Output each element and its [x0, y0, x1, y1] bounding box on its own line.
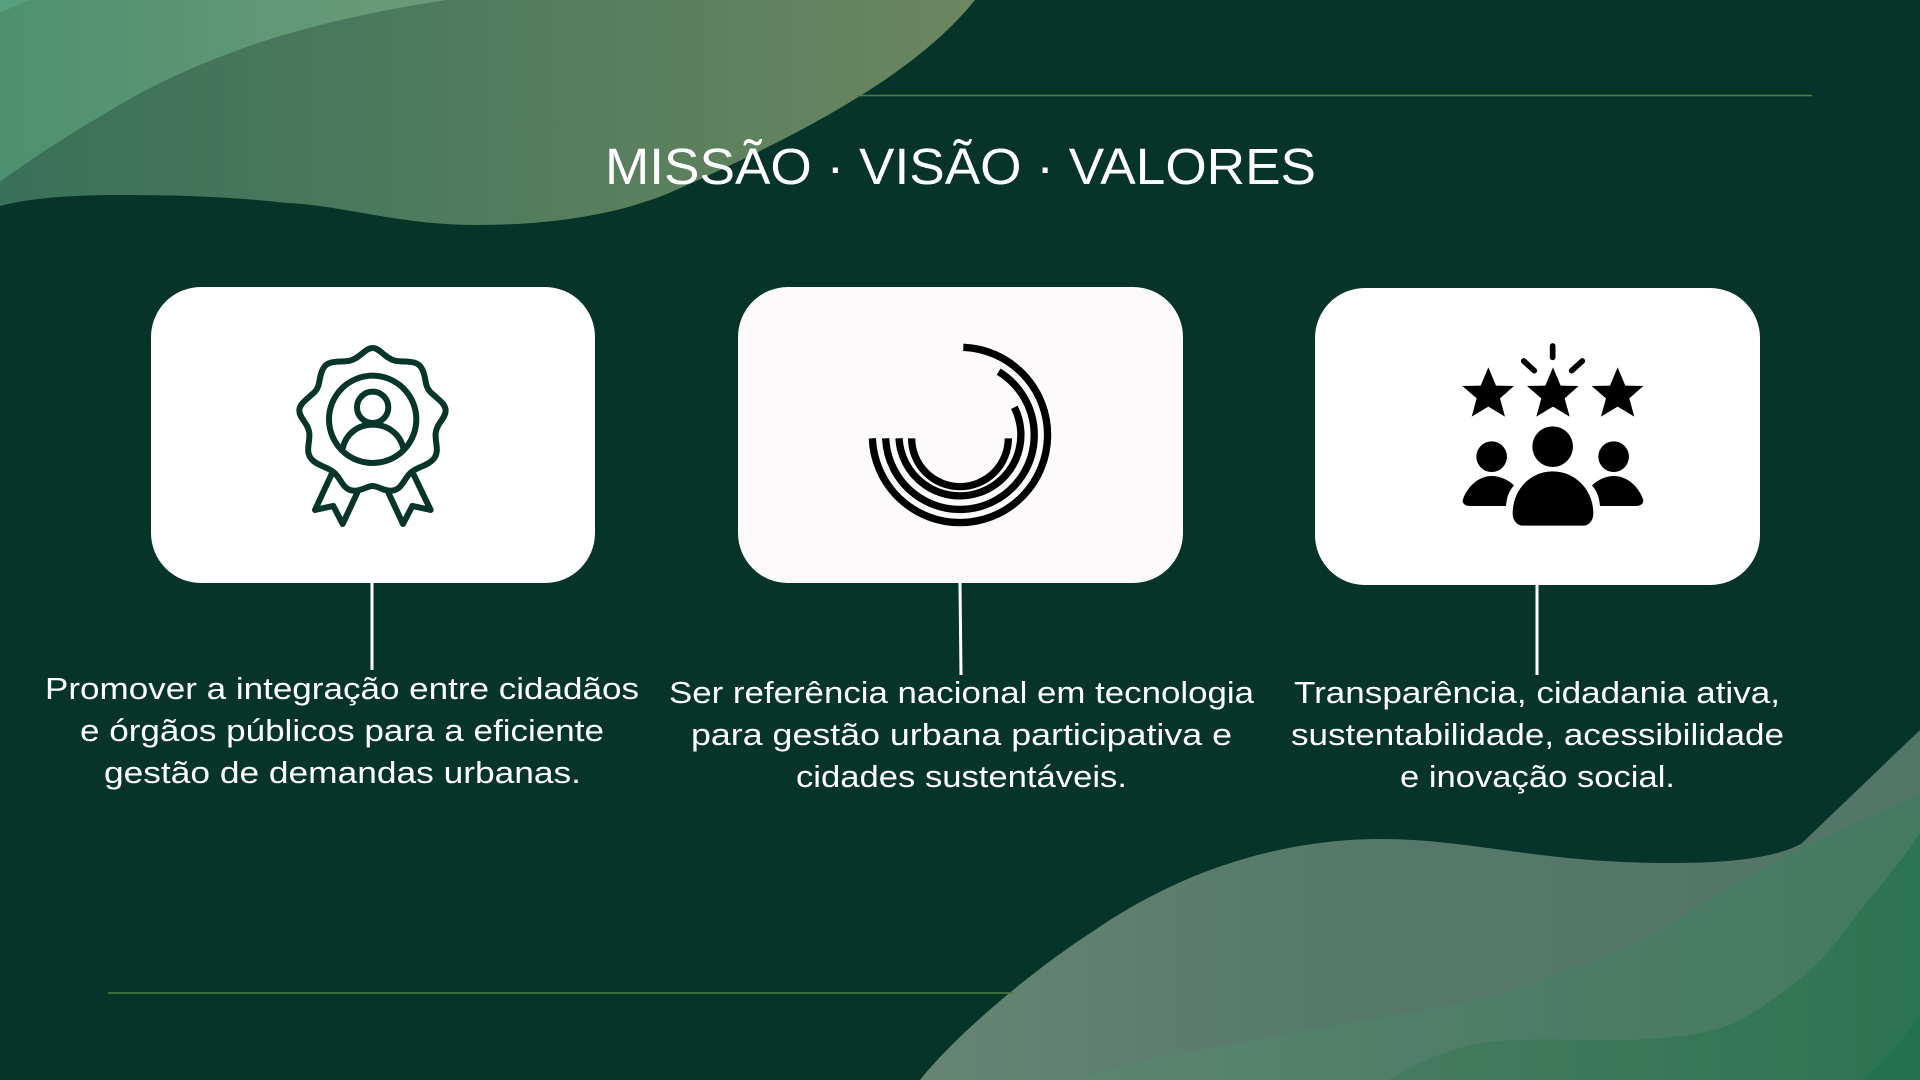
icon: award badge with person: [299, 348, 446, 524]
icon: concentric arcs: [872, 347, 1048, 523]
text: visão: para gestão urbana participativa e: [691, 717, 1232, 752]
card: missão: [151, 287, 595, 583]
title: MISSÃO · VISÃO · VALORES: [605, 138, 1316, 195]
connector line: [960, 583, 961, 675]
text: valores: sustentabilidade, acessibilidade: [1291, 717, 1784, 752]
text: visão: Ser referência nacional em tecnologia: [669, 675, 1255, 710]
text: missão: gestão de demandas urbanas.: [104, 755, 581, 790]
text: missão: e órgãos públicos para a eficiente: [80, 713, 604, 748]
card: valores: [1315, 288, 1760, 585]
connector line: [370, 583, 374, 670]
text: visão: cidades sustentáveis.: [796, 759, 1127, 794]
icon: people with stars: [1462, 346, 1643, 526]
panel: missão: [45, 287, 639, 790]
bottom-right decorative wave: [920, 730, 1920, 1080]
top-left decorative wave: [0, 0, 975, 225]
text: valores: e inovação social.: [1400, 759, 1675, 794]
text: missão: Promover a integração entre cidadãos: [45, 671, 639, 706]
text: missão: [45, 671, 639, 790]
text: valores: Transparência, cidadania ativa,: [1294, 675, 1780, 710]
card: visão: [738, 287, 1183, 583]
connector line: [1536, 585, 1538, 675]
panel: valores: [1291, 288, 1784, 794]
text: valores: [1291, 675, 1784, 794]
text: visão: [669, 675, 1255, 794]
panel: visão: [669, 287, 1255, 794]
